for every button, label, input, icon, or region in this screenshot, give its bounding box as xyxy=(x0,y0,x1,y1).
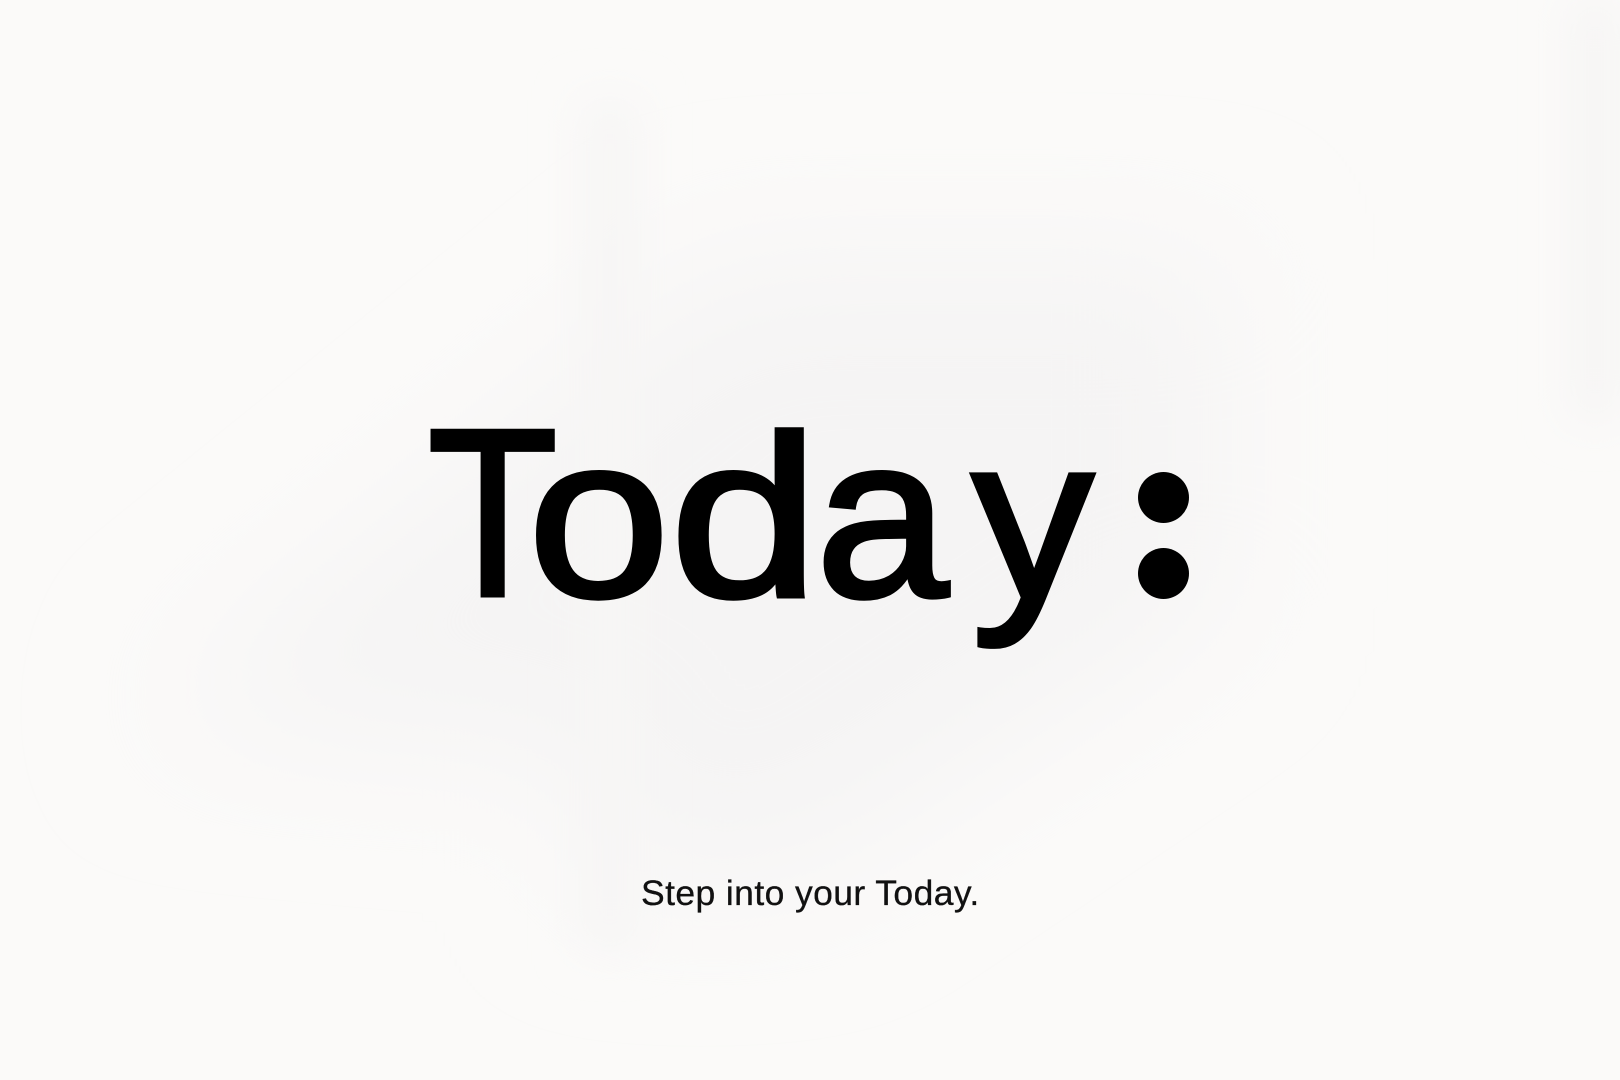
title: Today wordmark: y xyxy=(972,388,1093,648)
tagline: Step into your Today. xyxy=(641,873,980,913)
title: Today wordmark: T xyxy=(428,381,557,646)
title: Today wordmark: a xyxy=(816,390,948,645)
title: Today wordmark: d xyxy=(670,390,819,645)
title: Today wordmark: o xyxy=(528,390,669,645)
icon: colon dots xyxy=(1138,472,1189,599)
